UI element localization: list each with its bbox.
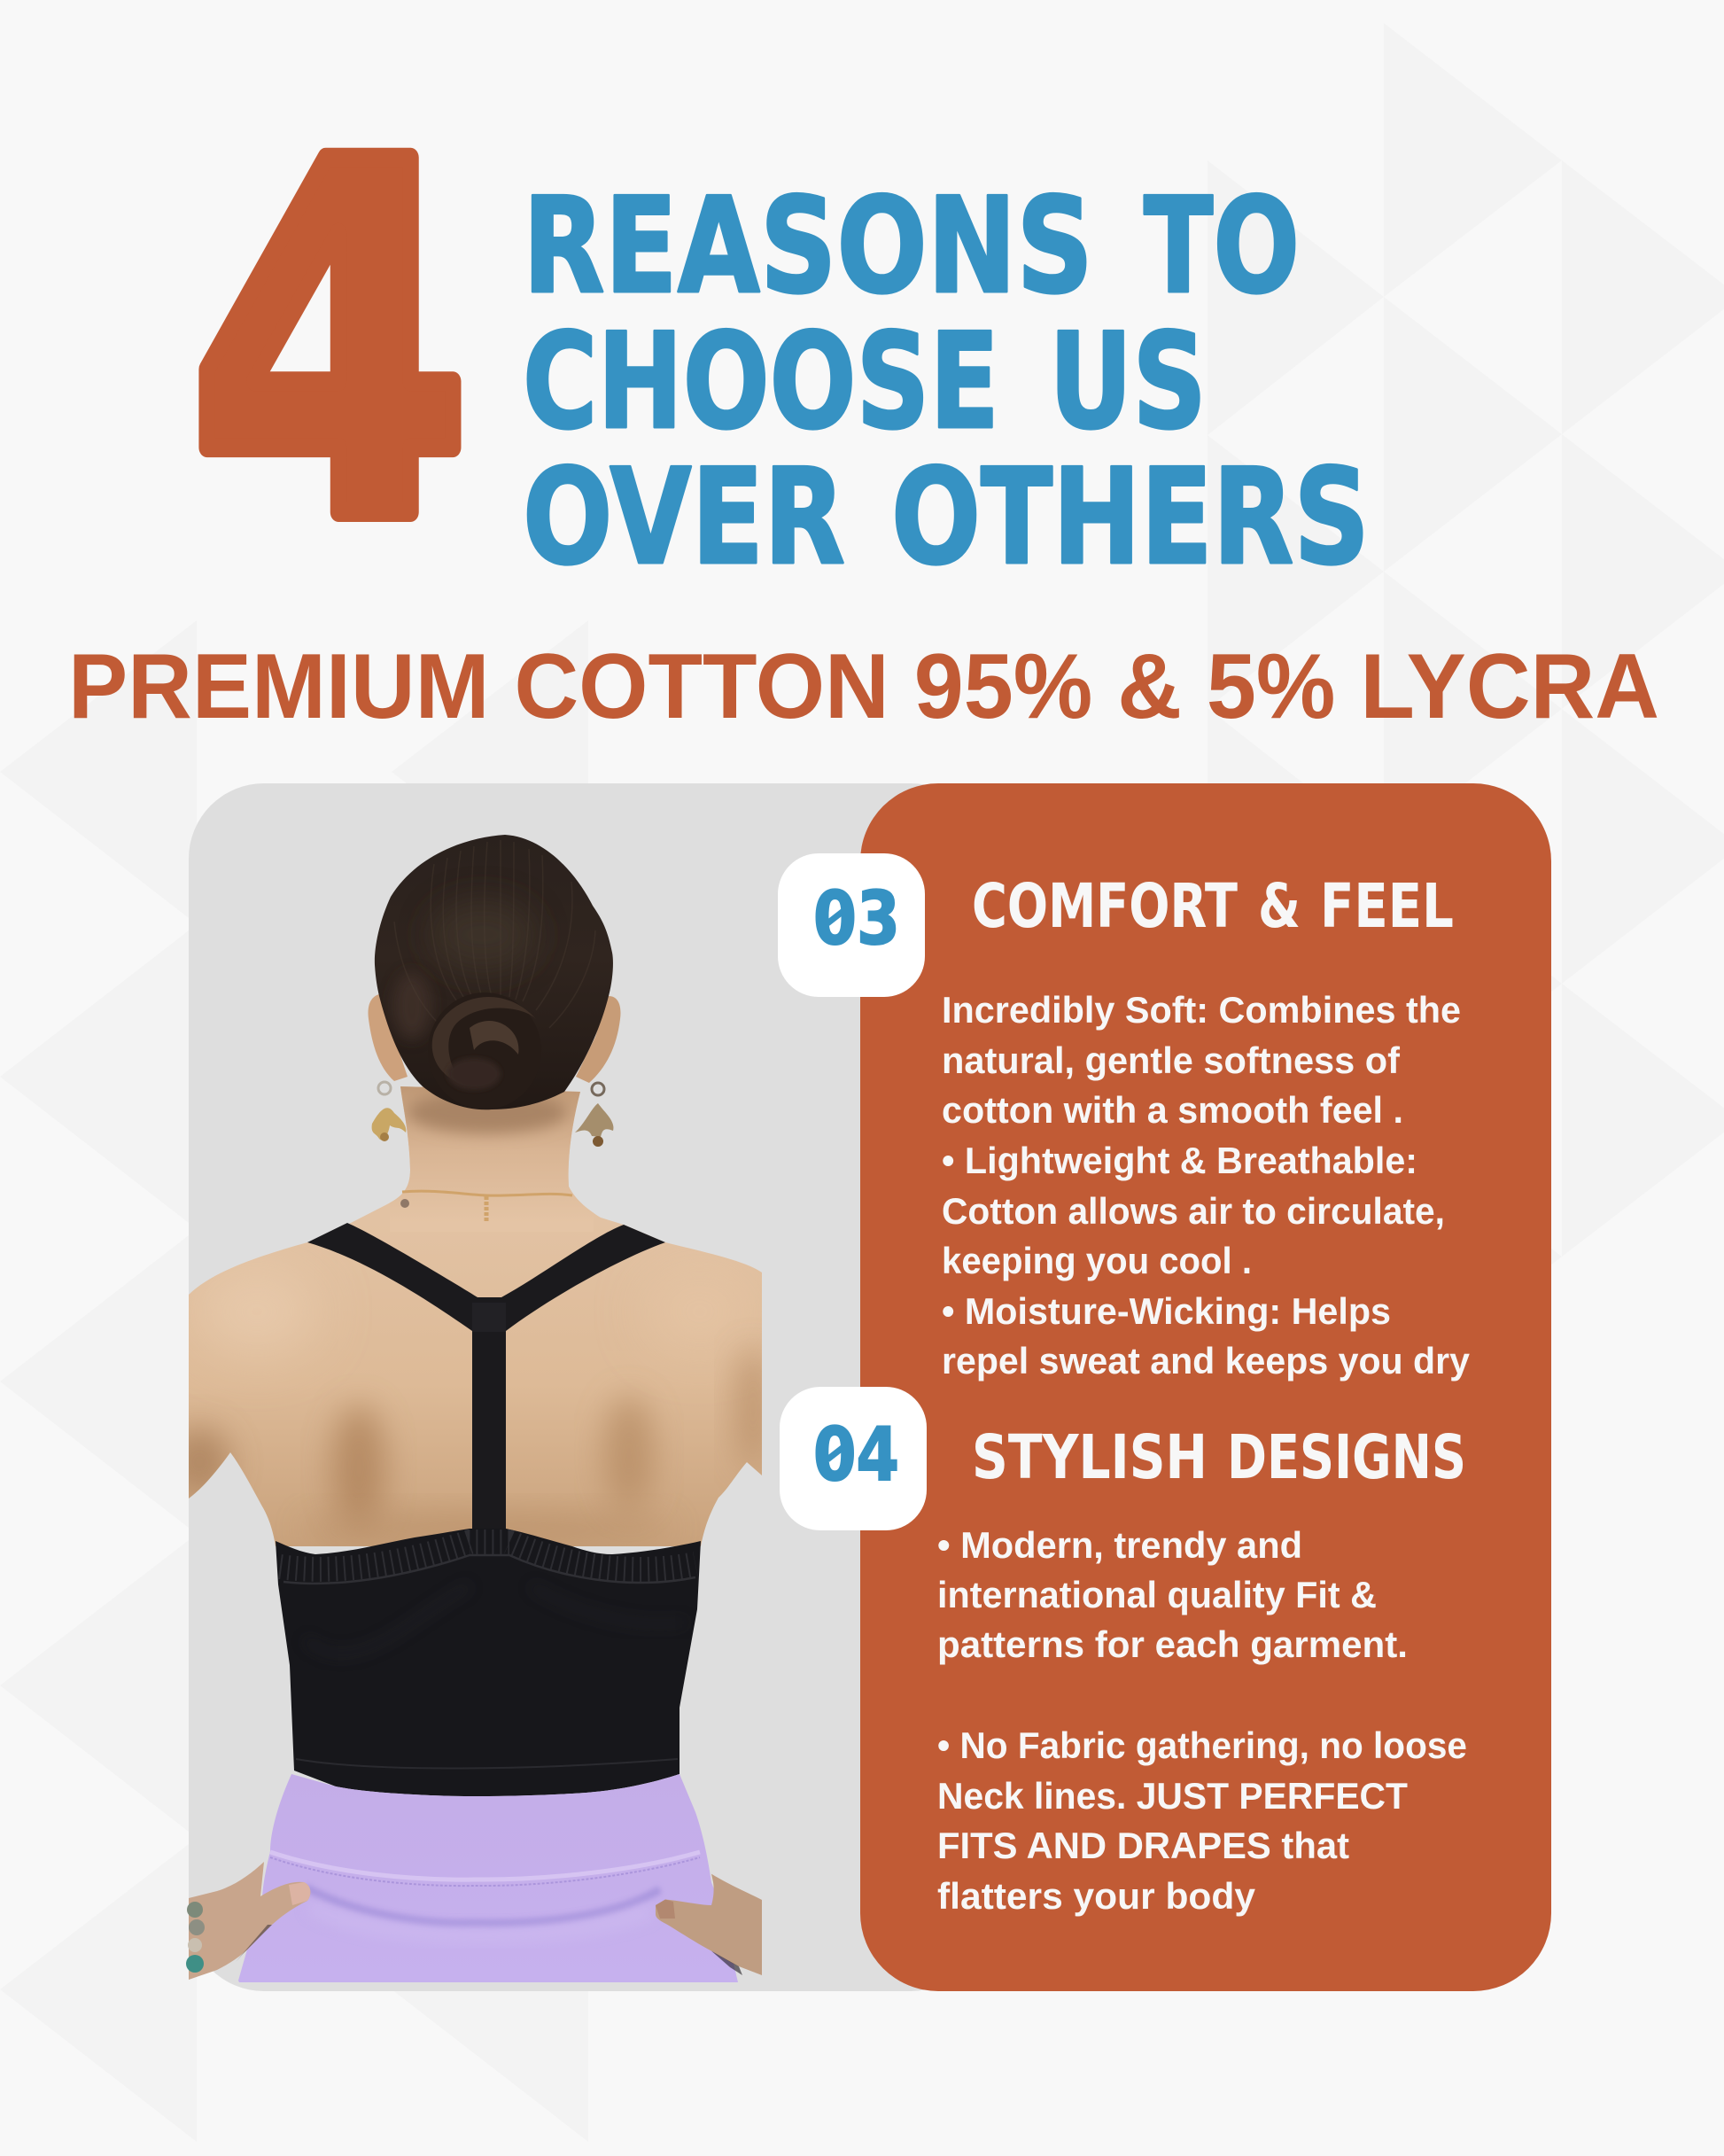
lilac leggings: [238, 1774, 738, 1982]
text block: design details: patterns for each garment.: [937, 1623, 1408, 1665]
big number 4: 4: [189, 61, 471, 627]
earring left: [372, 1082, 406, 1141]
ears: [369, 994, 620, 1083]
heading: comfort and feel: &: [1258, 871, 1301, 942]
badge 03: 03: [813, 876, 900, 961]
heading: comfort and feel: COMFORT: [972, 871, 1238, 942]
panel: grey photo backdrop: [189, 783, 986, 1991]
text block: comfort details: cotton with a smooth feel .: [942, 1089, 1403, 1131]
text block: comfort details: [942, 989, 1471, 1382]
hair: [375, 835, 613, 1109]
text block: design details: flatters your body: [937, 1875, 1256, 1917]
text block: comfort details: Incredibly Soft: Combines the: [942, 989, 1461, 1031]
text block: design details: • Modern, trendy and: [937, 1524, 1302, 1566]
text block: comfort details: natural, gentle softness of: [942, 1039, 1401, 1081]
badge 03: [778, 853, 925, 997]
right hand: [656, 1874, 762, 1975]
racerback straps: [307, 1223, 665, 1529]
title: reasons to choose us over others: [523, 170, 1370, 595]
earring right: [575, 1083, 613, 1147]
text block: design details: FITS AND DRAPES that: [937, 1825, 1349, 1866]
text block: design details: international quality Fit &: [937, 1574, 1377, 1615]
heading: stylish designs: [972, 1422, 1466, 1493]
text block: design details: Neck lines. JUST PERFECT: [937, 1775, 1408, 1817]
text block: design details: • No Fabric gathering, no loose: [937, 1724, 1467, 1766]
text block: comfort details: • Moisture-Wicking: Helps: [942, 1290, 1391, 1332]
badge 04: 04: [813, 1412, 899, 1498]
text block: comfort details: • Lightweight & Breathable:: [942, 1140, 1417, 1181]
text block: design details: [937, 1524, 1467, 1917]
left hand with bracelet: [186, 1862, 310, 1980]
heading: stylish designs: DESIGNS: [1227, 1422, 1466, 1493]
photo: woman from behind in racerback top and lilac leggings: [168, 835, 771, 1982]
text block: comfort details: Cotton allows air to circulate,: [942, 1190, 1445, 1232]
hair bun: [428, 992, 541, 1109]
text block: comfort details: repel sweat and keeps you dry: [942, 1340, 1471, 1382]
title: reasons to choose us over others: OVER: [523, 441, 845, 595]
heading: comfort and feel: FEEL: [1320, 871, 1454, 942]
panel: orange reasons card: [860, 783, 1551, 1991]
text block: comfort details: keeping you cool .: [942, 1240, 1252, 1281]
necklace: [400, 1191, 572, 1223]
subtitle: fabric composition: PREMIUM COTTON 95% & 5% LYCRA: [68, 635, 1659, 738]
heading: stylish designs: STYLISH: [972, 1422, 1208, 1493]
title: reasons to choose us over others: US: [1049, 306, 1207, 459]
skin: back, shoulders and arms: [168, 1081, 771, 1546]
title: reasons to choose us over others: CHOOSE: [523, 306, 999, 459]
title: reasons to choose us over others: REASONS: [523, 170, 1093, 323]
title: reasons to choose us over others: TO: [1144, 170, 1300, 323]
badge 04: [780, 1387, 927, 1530]
black crop top: [276, 1529, 701, 1796]
title: reasons to choose us over others: OTHERS: [891, 441, 1370, 595]
